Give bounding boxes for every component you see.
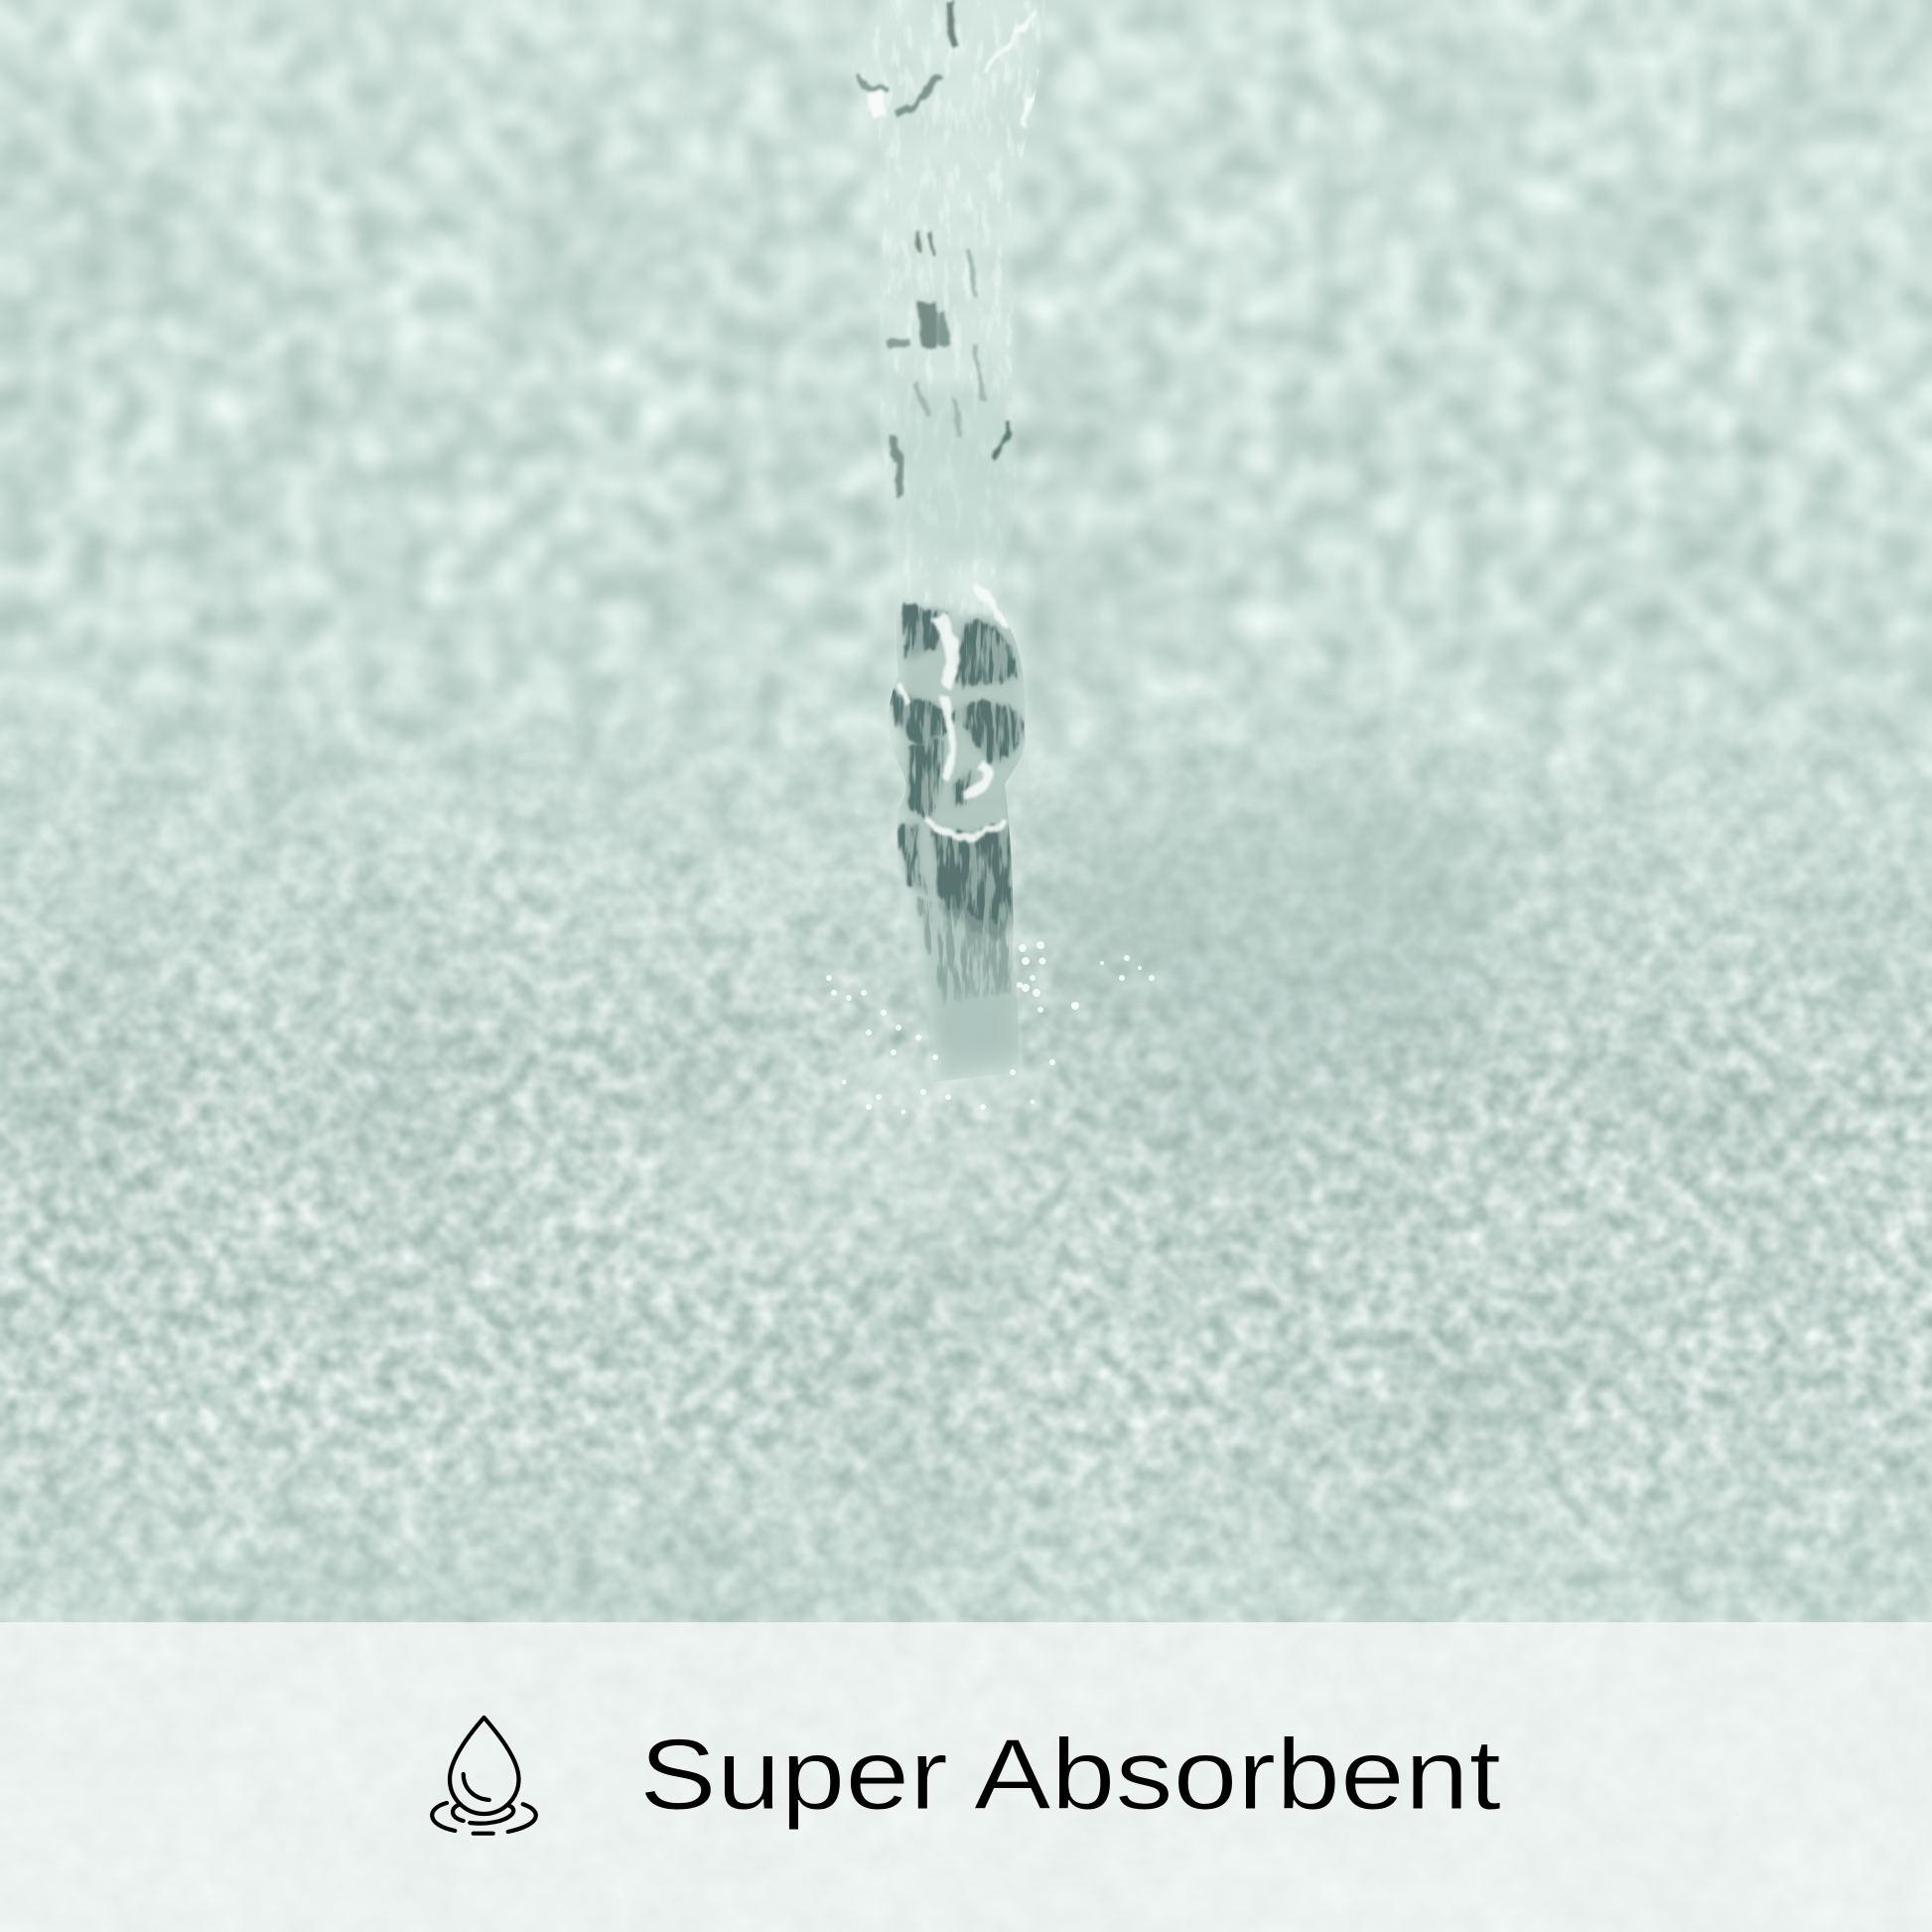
upper stream details bbox=[856, 0, 1040, 496]
caption banner bbox=[0, 1622, 1932, 1932]
lower stream highlights bbox=[898, 586, 1008, 836]
caption: Super Absorbent: Super Absorbent bbox=[639, 1720, 1501, 1831]
water stream bbox=[844, 0, 1052, 1082]
lower stream dark refractions bbox=[890, 606, 1025, 938]
icon: water drop with ripples bbox=[432, 1718, 536, 1834]
splash and sparkles at the base of the stream bbox=[826, 941, 1155, 1114]
